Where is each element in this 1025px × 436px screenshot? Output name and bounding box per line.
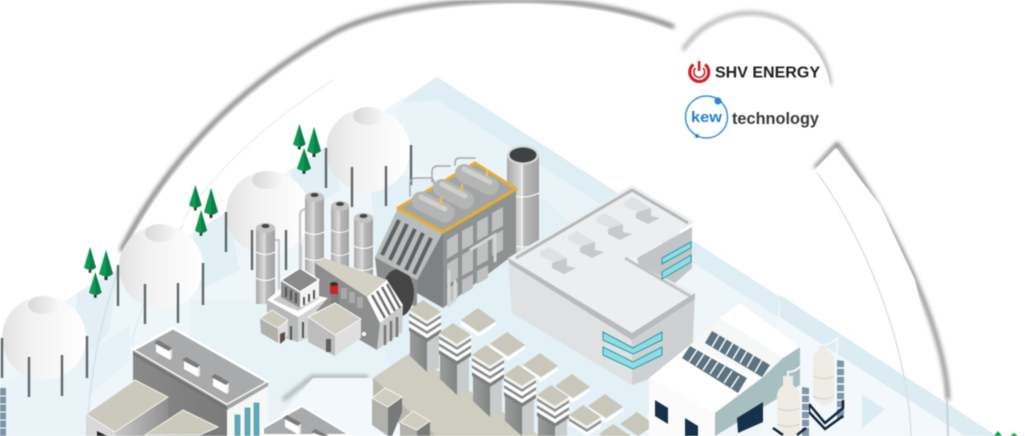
SHV Energy logo xyxy=(690,61,821,82)
sphere tank 3 xyxy=(226,171,310,270)
scaffold at left edge xyxy=(0,388,6,436)
small compressor building xyxy=(267,245,328,342)
sphere tank 1 xyxy=(2,296,87,397)
main left building xyxy=(133,328,268,436)
small annex house xyxy=(260,310,288,344)
gas turbine towers xyxy=(256,192,373,304)
teal chevrons xyxy=(603,242,691,369)
Kew Technology logo xyxy=(686,96,820,138)
white factory with solar roof xyxy=(649,303,800,436)
trees group C xyxy=(293,124,321,174)
cooling tower units xyxy=(409,300,631,436)
trees group B xyxy=(189,185,218,236)
road shadows xyxy=(207,298,605,436)
small platform huts xyxy=(372,388,430,436)
combustion building xyxy=(315,258,403,350)
sphere tank 2 xyxy=(118,224,203,324)
roof vents xyxy=(540,197,660,274)
red stack xyxy=(330,282,339,312)
solar panels xyxy=(682,331,770,393)
front annex buildings xyxy=(86,380,218,436)
sphere tank 4 xyxy=(326,107,411,207)
inner arcs xyxy=(87,80,948,436)
distant trees at right xyxy=(994,431,1018,436)
lower centre building xyxy=(263,406,350,436)
exhaust stack xyxy=(507,146,539,254)
roof vents xyxy=(154,340,229,394)
cooling tower upper units xyxy=(450,308,655,436)
outer arc with shadow xyxy=(110,0,948,400)
steam drums xyxy=(410,158,490,213)
silo 2 xyxy=(809,338,844,429)
teal windows xyxy=(235,403,259,436)
factory doors and windows xyxy=(655,400,763,436)
cooling tower platform xyxy=(373,353,540,436)
silo 1 xyxy=(773,366,809,436)
centre house xyxy=(308,303,361,356)
grey office building xyxy=(508,185,695,385)
Kew Technology logo: kew xyxy=(691,109,722,126)
logo circle xyxy=(673,13,831,176)
SHV Energy logo: SHV ENERGY xyxy=(715,64,821,82)
Kew Technology logo: technology xyxy=(732,110,820,128)
trees group A xyxy=(84,247,113,298)
big boiler unit xyxy=(375,146,539,317)
